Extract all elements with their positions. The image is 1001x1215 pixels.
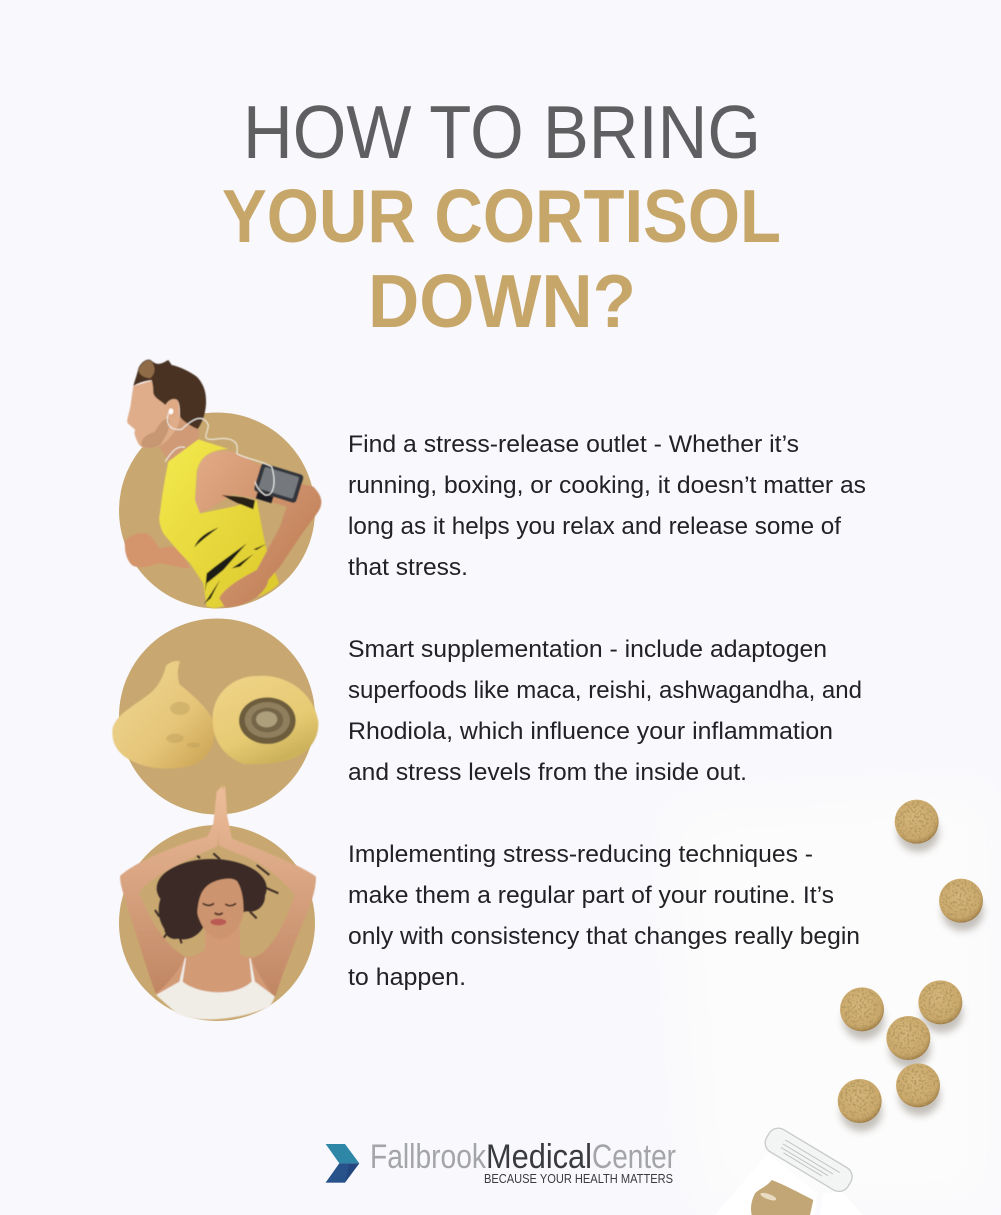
paragraph: smart supplementation: Smart supplementation - include adaptogen (348, 636, 827, 663)
face (127, 381, 180, 448)
scattered pills (838, 800, 983, 1131)
illustration: maca roots on gold circle (112, 618, 318, 814)
paragraph: smart supplementation: Rhodiola, which influence your inflammation (348, 718, 833, 745)
gold circle 2 (119, 618, 315, 814)
left maca root blemishes (166, 702, 200, 748)
paragraph: stress-reducing techniques: only with consistency that changes really begin (348, 923, 860, 950)
face (197, 879, 243, 939)
neck (183, 927, 257, 997)
upper arm and forearm (195, 451, 321, 607)
title line 1: HOW TO BRING (243, 90, 761, 174)
lips (210, 919, 226, 925)
jar contents (751, 1180, 813, 1215)
hair tendrils (155, 853, 278, 943)
paragraph: stress-reducing techniques: make them a regular part of your routine. It’s (348, 882, 834, 909)
gold circle 1 (119, 412, 315, 608)
closed eyes (203, 903, 236, 906)
left arm (120, 785, 223, 994)
armband screen (258, 467, 299, 499)
yellow tank top (159, 439, 279, 608)
pill faces (838, 800, 983, 1123)
illustration: woman meditating on gold circle (119, 785, 316, 1021)
dark armpit shadow (222, 495, 255, 509)
paragraph: smart supplementation: superfoods like maca, reishi, ashwagandha, and (348, 677, 862, 704)
paragraph: stress-reducing techniques: Implementing stress-reducing techniques - (348, 841, 813, 868)
neck (155, 417, 199, 462)
torso (157, 957, 275, 1007)
jar content highlight (760, 1191, 777, 1202)
title line 2: YOUR CORTISOL (222, 174, 781, 258)
ear (168, 400, 179, 417)
runner figure (125, 360, 321, 608)
hair mass (157, 859, 267, 939)
title line 3: DOWN? (368, 259, 636, 343)
logo: Fallbrook Medical Center (326, 1138, 676, 1186)
right arm (219, 785, 316, 998)
paragraph: stress-reducing techniques: to happen. (348, 964, 466, 991)
left maca root (112, 661, 215, 769)
jar rim (761, 1124, 856, 1195)
pill texture (839, 801, 982, 1122)
logo: Fallbrook Medical Center: Center (592, 1138, 676, 1176)
paragraph: smart supplementation (348, 636, 862, 786)
maca cut centre (239, 697, 296, 744)
fist and rear forearm (125, 533, 190, 568)
logo wordmark: Fallbrook (370, 1138, 487, 1176)
white top (156, 957, 275, 1019)
paragraph: smart supplementation: and stress levels from the inside out. (348, 759, 747, 786)
black shirt stripes (194, 527, 266, 604)
armband (251, 463, 304, 510)
illustration: runner on gold circle (119, 360, 321, 608)
earbud (169, 408, 173, 414)
title (222, 90, 781, 343)
right maca root (213, 676, 318, 764)
white photo area, lower right (660, 780, 1001, 1215)
paragraph: stress-release outlet: running, boxing, or cooking, it doesn’t matter as (348, 472, 866, 499)
paragraph: stress-reducing techniques (348, 841, 860, 991)
stubble (141, 418, 169, 448)
logo: Fallbrook Medical Center: Medical (486, 1138, 592, 1176)
logo tagline: BECAUSE YOUR HEALTH MATTERS (484, 1171, 673, 1186)
paragraph: stress-release outlet: that stress. (348, 554, 468, 581)
logo chevron icon (326, 1144, 359, 1183)
glass jar (715, 1124, 863, 1215)
maca roots (112, 661, 318, 769)
gold circle 3 (119, 825, 315, 1021)
jar body (715, 1153, 863, 1215)
paragraph: stress-release outlet: long as it helps you relax and release some of (348, 513, 841, 540)
earphone wire (165, 410, 274, 495)
pill shadows (841, 813, 983, 1131)
woman figure (120, 785, 316, 1019)
hair (133, 360, 206, 429)
paragraph: stress-release outlet (348, 431, 866, 581)
hair highlight (138, 360, 155, 378)
nose (215, 913, 223, 914)
paragraph: stress-release outlet: Find a stress-release outlet - Whether it’s (348, 431, 799, 458)
